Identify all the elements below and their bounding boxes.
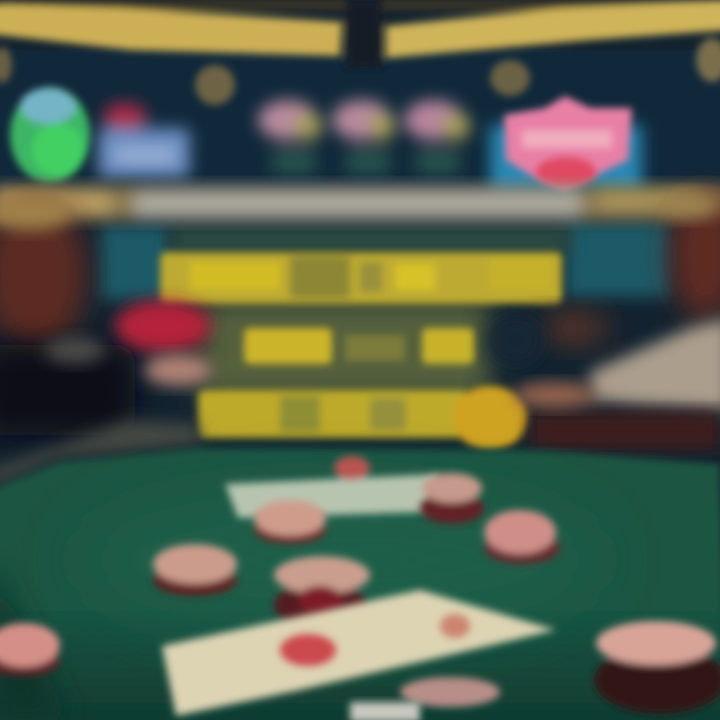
chip: far right	[594, 621, 720, 714]
table rail	[0, 420, 200, 488]
chip: far left	[0, 623, 60, 676]
playing cards: back row	[225, 456, 440, 518]
poker table felt	[0, 448, 720, 720]
person: left player	[0, 194, 212, 435]
yellow banner backing	[200, 300, 490, 400]
chip: centre stack	[274, 556, 370, 629]
sign: three slot symbols	[258, 100, 470, 174]
poker chips	[0, 473, 720, 714]
marquee band	[0, 186, 720, 220]
yellow banner: top row	[160, 252, 562, 304]
yellow banner: bottom row	[198, 386, 528, 450]
chip: right	[484, 510, 560, 564]
sign: red and blue emblem	[98, 103, 190, 178]
chip: back right	[420, 473, 484, 524]
yellow banner: middle row	[244, 328, 474, 364]
playing cards: front	[162, 590, 556, 720]
sign: green balloon	[10, 87, 90, 183]
sign: large pink emblem	[490, 96, 642, 192]
ceiling lights	[0, 0, 720, 105]
chip: left	[153, 544, 237, 596]
chip: back left	[254, 500, 326, 544]
person: right player	[487, 190, 720, 450]
